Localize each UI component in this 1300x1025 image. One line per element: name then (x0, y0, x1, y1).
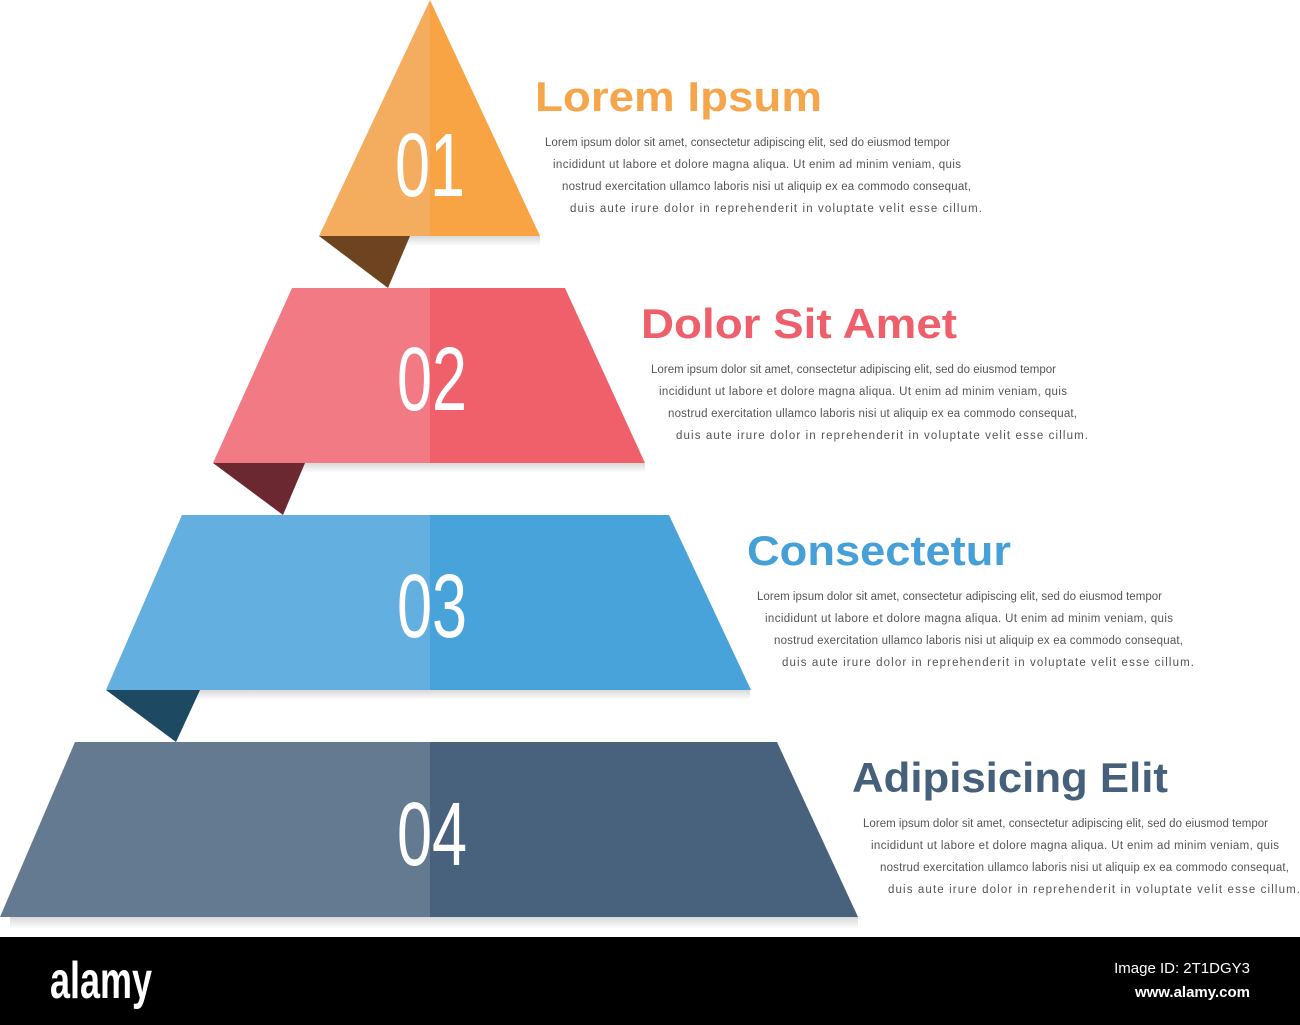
tier 3 (106, 515, 751, 742)
footer bar (0, 937, 1300, 1025)
text block 2: incididunt ut labore et dolore magna aliqua. Ut enim ad minim veniam, quis (659, 386, 1067, 398)
text block 1: Lorem ipsum dolor sit amet, consectetur adipiscing elit, sed do eiusmod tempor (545, 137, 950, 149)
tier 2 (213, 288, 645, 515)
alamy logo: alamy (50, 952, 152, 1010)
text block 1: Lorem Ipsum (535, 73, 822, 120)
text block 2: Lorem ipsum dolor sit amet, consectetur adipiscing elit, sed do eiusmod tempor (651, 364, 1056, 376)
text block 4: Lorem ipsum dolor sit amet, consectetur adipiscing elit, sed do eiusmod tempor (863, 818, 1268, 830)
text block 4: duis aute irure dolor in reprehenderit in voluptate velit esse cillum. (888, 884, 1300, 896)
fold 3 (106, 690, 200, 742)
text block 3: Consectetur (747, 527, 1011, 574)
footer bar: www.alamy.com (1134, 984, 1250, 1001)
number 02: 02 (397, 330, 467, 430)
tier 1 (319, 0, 540, 288)
fold 2 (213, 463, 305, 515)
text block 3: nostrud exercitation ullamco laboris nisi ut aliquip ex ea commodo consequat, (774, 635, 1183, 647)
text block 2 (641, 300, 1088, 442)
text block 2: Dolor Sit Amet (641, 300, 957, 347)
text block 1: duis aute irure dolor in reprehenderit in voluptate velit esse cillum. (570, 203, 982, 215)
text block 3: duis aute irure dolor in reprehenderit in voluptate velit esse cillum. (782, 657, 1194, 669)
text block 2: nostrud exercitation ullamco laboris nisi ut aliquip ex ea commodo consequat, (668, 408, 1077, 420)
image id: Image ID: 2T1DGY3 (1114, 960, 1250, 977)
text block 3 (747, 527, 1194, 669)
text block 3: Lorem ipsum dolor sit amet, consectetur adipiscing elit, sed do eiusmod tempor (757, 591, 1162, 603)
text block 4: nostrud exercitation ullamco laboris nisi ut aliquip ex ea commodo consequat, (880, 862, 1289, 874)
text block 3: incididunt ut labore et dolore magna aliqua. Ut enim ad minim veniam, quis (765, 613, 1173, 625)
text block 4: Adipisicing Elit (852, 754, 1168, 801)
text block 2: duis aute irure dolor in reprehenderit in voluptate velit esse cillum. (676, 430, 1088, 442)
text block 1: incididunt ut labore et dolore magna aliqua. Ut enim ad minim veniam, quis (553, 159, 961, 171)
text block 1 (535, 73, 982, 215)
fold 1 (319, 236, 410, 288)
tier 4 (0, 742, 858, 929)
number 01: 01 (395, 116, 465, 216)
text block 1: nostrud exercitation ullamco laboris nisi ut aliquip ex ea commodo consequat, (562, 181, 971, 193)
text block 4 (852, 754, 1300, 896)
text block 4: incididunt ut labore et dolore magna aliqua. Ut enim ad minim veniam, quis (871, 840, 1279, 852)
number 03: 03 (397, 557, 467, 657)
number 04: 04 (397, 785, 467, 885)
